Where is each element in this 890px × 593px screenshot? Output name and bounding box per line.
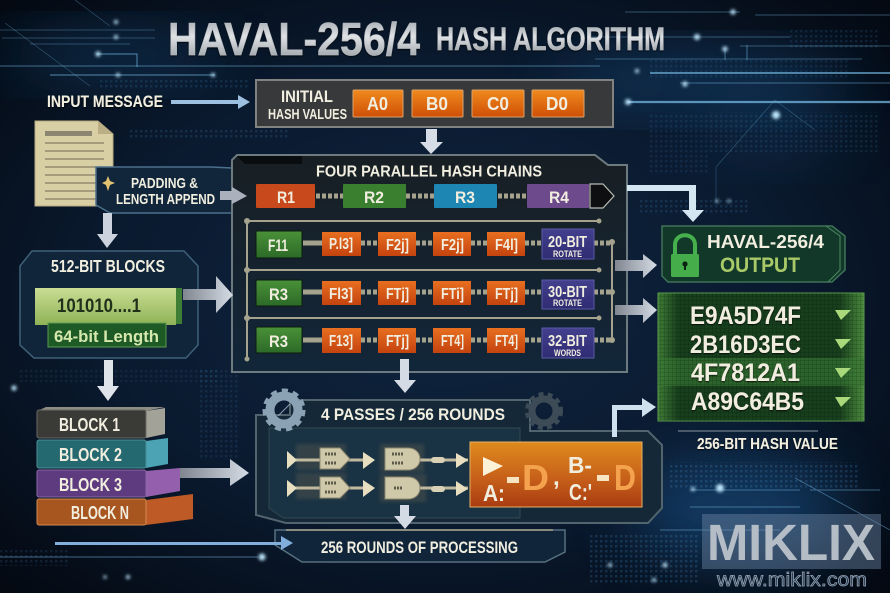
icon: input document bbox=[35, 121, 113, 206]
arrow: initial values to hash chains bbox=[420, 129, 443, 154]
arrow: padding to 512-bit blocks bbox=[97, 213, 118, 248]
arrow: chains to output bbox=[627, 185, 704, 222]
icon: padlock bbox=[671, 235, 699, 277]
block 1: BLOCK 1 bbox=[59, 415, 120, 435]
row 1 functions: F4l] bbox=[495, 237, 518, 254]
panel: 256 rounds of processing: 256 ROUNDS OF PROCESSING bbox=[321, 539, 518, 557]
value: B0 bbox=[412, 90, 463, 117]
block 2 bbox=[37, 438, 168, 468]
row 1 functions: F11 bbox=[268, 236, 288, 255]
chain R4: R4 bbox=[549, 188, 569, 207]
block N: BLOCK N bbox=[71, 503, 129, 523]
chain R3 bbox=[434, 184, 497, 208]
row 3 functions bbox=[256, 327, 594, 358]
row 1 functions: P.l3] bbox=[329, 236, 353, 253]
row 2 functions: FTj] bbox=[386, 286, 409, 303]
row 1 functions: F2j] bbox=[386, 237, 409, 254]
formula box: A: bbox=[483, 480, 505, 506]
panel: padding and length append: PADDING & bbox=[131, 175, 198, 192]
formula box: D bbox=[614, 457, 636, 498]
chain R2 bbox=[343, 184, 406, 208]
panel: padding and length append: LENGTH APPEND bbox=[116, 191, 215, 208]
panel: hash value rows: A89C64B5 bbox=[691, 388, 804, 416]
value: C0: C0 bbox=[487, 93, 509, 114]
row 3 functions: FTj] bbox=[386, 333, 409, 350]
data block: 101010....1 bbox=[57, 296, 141, 317]
block stack bbox=[37, 407, 193, 525]
row 2 functions bbox=[256, 280, 594, 309]
block 2: BLOCK 2 bbox=[59, 445, 122, 465]
arrow: 512-bit blocks to block stack bbox=[97, 360, 119, 401]
arrow: rotate row to hash value bbox=[615, 298, 657, 323]
row 2 functions: FTj] bbox=[495, 286, 518, 303]
chain R1: R1 bbox=[277, 188, 295, 207]
length block: 64-bit Length bbox=[54, 327, 159, 346]
block 3: BLOCK 3 bbox=[59, 475, 122, 495]
panel: 256 rounds of processing bbox=[275, 530, 565, 562]
title bbox=[168, 13, 665, 65]
rails bbox=[244, 218, 615, 362]
panel: 512-bit blocks: 512-BIT BLOCKS bbox=[51, 256, 165, 276]
block 1 bbox=[37, 407, 165, 438]
panel: hash value rows: E9A5D74F bbox=[690, 302, 801, 330]
formula box bbox=[470, 442, 642, 507]
chain R3: R3 bbox=[455, 188, 475, 207]
formula box: B- bbox=[568, 452, 592, 478]
panel: padding and length append bbox=[96, 167, 232, 213]
watermark: MIKLIX: MIKLIX bbox=[707, 514, 875, 571]
icon: right gear bbox=[527, 394, 561, 428]
arrow: input message to initial hash values bbox=[171, 95, 250, 109]
hash value caption: 256-BIT HASH VALUE bbox=[697, 436, 838, 453]
arrow: chains to passes bbox=[394, 359, 416, 393]
icon: left gear bbox=[265, 391, 303, 429]
panel: initial hash values bbox=[256, 80, 613, 127]
value: D0 bbox=[532, 90, 584, 117]
input message label: INPUT MESSAGE bbox=[47, 93, 163, 111]
block 3 bbox=[37, 468, 180, 497]
icon: chain end arrow bbox=[590, 184, 614, 208]
panel: initial hash values: HASH VALUES bbox=[268, 106, 347, 123]
formula box: C:' bbox=[569, 479, 592, 505]
value: B0: B0 bbox=[426, 93, 448, 114]
row 2 functions: 30-BIT bbox=[548, 284, 587, 301]
panel: 4 passes: 4 PASSES / 256 ROUNDS bbox=[321, 405, 505, 424]
value: A0: A0 bbox=[367, 93, 388, 114]
rule above hash caption bbox=[678, 430, 818, 432]
panel: output: HAVAL-256/4 bbox=[707, 232, 824, 252]
value: C0 bbox=[472, 90, 524, 117]
arrow: into 256 rounds bbox=[55, 536, 293, 550]
panel: hash value rows bbox=[658, 293, 864, 421]
chain R2: R2 bbox=[364, 188, 384, 207]
row 2 functions: ROTATE bbox=[553, 298, 582, 308]
data block bbox=[35, 288, 182, 325]
formula box: D bbox=[522, 457, 549, 498]
panel: output bbox=[662, 226, 845, 282]
row 3 functions: FT4] bbox=[495, 333, 518, 350]
row 2 functions: FTi] bbox=[441, 286, 464, 303]
formula box: , bbox=[553, 464, 560, 491]
watermark: MIKLIX: www.miklix.com bbox=[716, 570, 867, 591]
icon: plus spark bbox=[102, 176, 115, 191]
icon: row markers bbox=[835, 310, 851, 407]
arrow: 512-bit blocks to chains bbox=[183, 276, 233, 313]
panel: hash value rows: 2B16D3EC bbox=[690, 331, 801, 359]
row 3 functions: F13] bbox=[329, 333, 353, 350]
arrow: block stack to passes bbox=[180, 459, 249, 486]
panel: 512-bit blocks bbox=[20, 251, 198, 358]
row 1 functions: F2j] bbox=[441, 237, 464, 254]
row 3 functions: WORDS bbox=[554, 348, 581, 358]
title: HAVAL-256/4 bbox=[168, 13, 420, 65]
panel: four parallel hash chains bbox=[232, 155, 627, 372]
panel: output: OUTPUT bbox=[720, 254, 800, 277]
row 3 functions: R3 bbox=[269, 332, 288, 351]
logic gates bbox=[287, 444, 468, 502]
row 1 functions bbox=[256, 229, 594, 259]
arrow: rotate row to output bbox=[615, 254, 657, 278]
chain R4 bbox=[527, 184, 589, 208]
panel: four parallel hash chains: FOUR PARALLEL HASH CHAINS bbox=[316, 164, 542, 180]
row 3 functions: 32-BIT bbox=[548, 333, 587, 350]
block N bbox=[37, 494, 193, 525]
row 2 functions: Fl3] bbox=[329, 286, 353, 303]
panel: hash value rows: 4F7812A1 bbox=[691, 359, 800, 387]
arrow: passes to rounds bbox=[394, 505, 416, 529]
row 2 functions: R3 bbox=[269, 285, 288, 304]
value: A0 bbox=[353, 90, 403, 117]
value: D0: D0 bbox=[546, 93, 568, 114]
arrow: passes to hash value bbox=[612, 398, 656, 437]
row 1 functions: ROTATE bbox=[553, 249, 582, 259]
panel: 4 passes bbox=[256, 391, 662, 523]
chain connectors bbox=[316, 194, 527, 198]
arrow: padding to chains bbox=[220, 187, 247, 204]
row 1 functions: 20-BIT bbox=[548, 234, 587, 251]
chain R1 bbox=[256, 184, 315, 208]
title: HASH ALGORITHM bbox=[436, 21, 665, 57]
row 3 functions: FT4] bbox=[441, 333, 464, 350]
panel: initial hash values: INITIAL bbox=[281, 88, 333, 106]
